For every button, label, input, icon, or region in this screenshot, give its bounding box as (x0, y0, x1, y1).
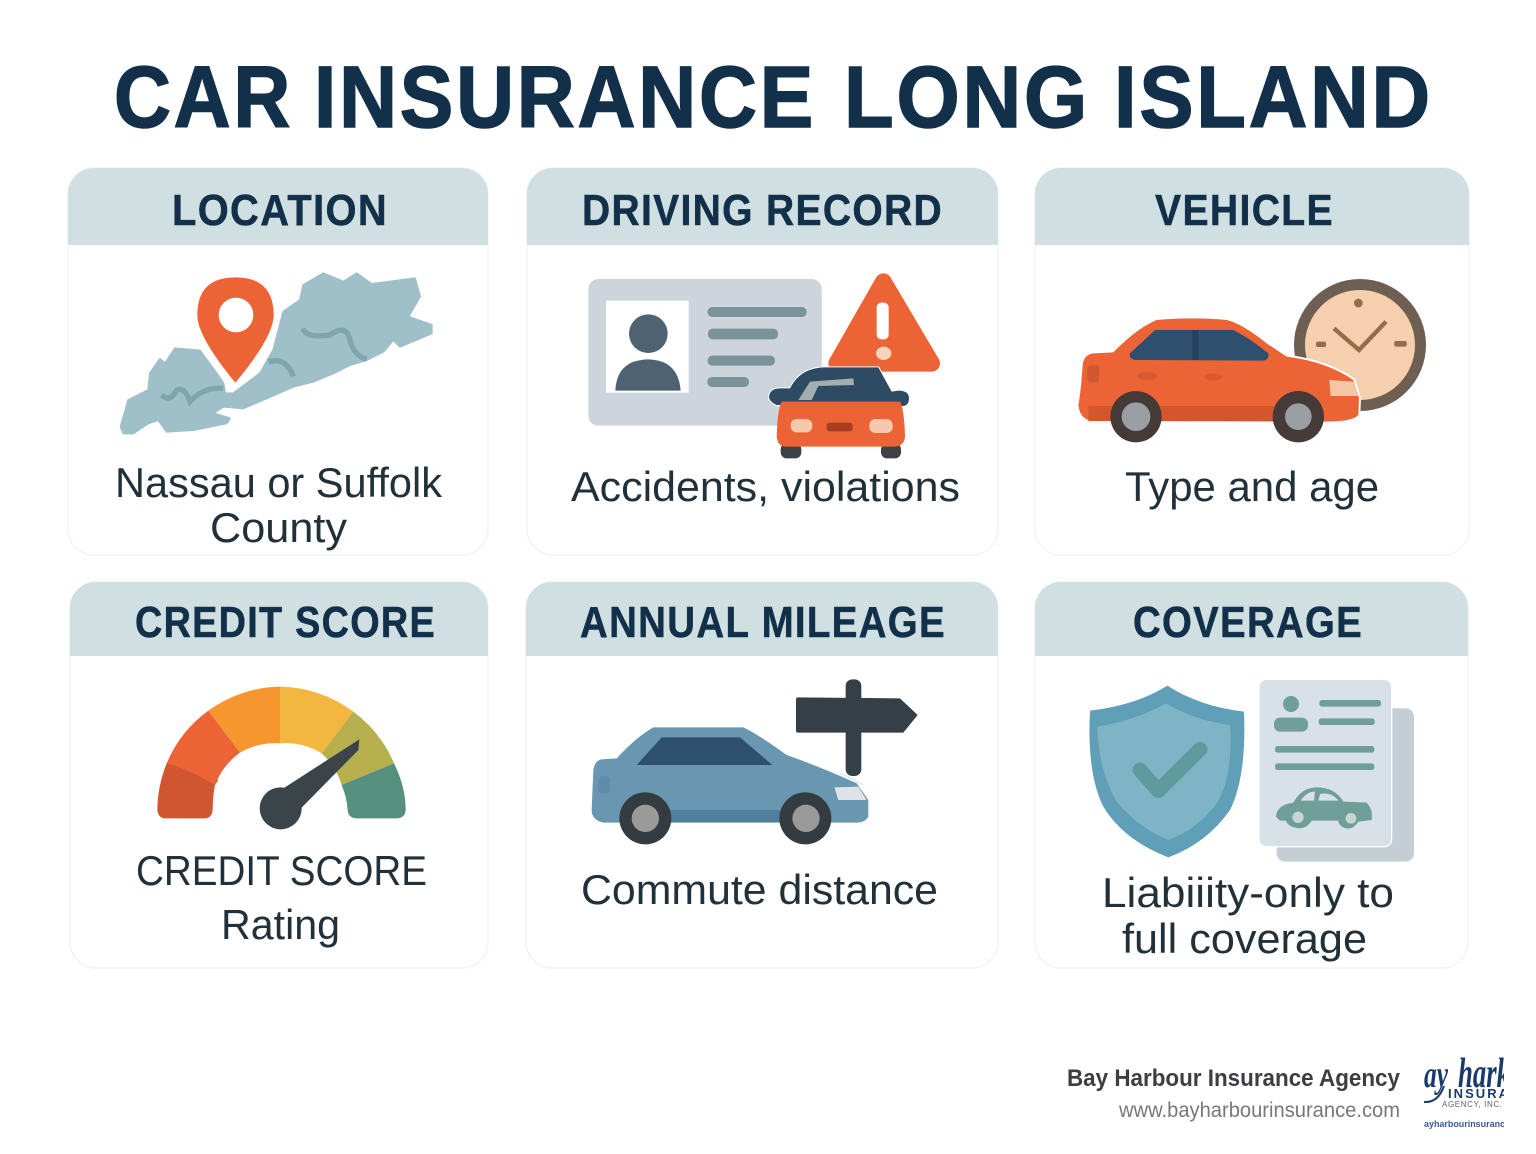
title: CAR (114, 49, 293, 146)
text: coverage: Liabiiity-only to (1102, 869, 1394, 916)
title: INSURANCE (314, 49, 816, 146)
heading: location: LOCATION (172, 186, 388, 235)
panel: annual mileage (526, 582, 998, 968)
text: credit score: CREDIT SCORE (136, 847, 427, 894)
text: driving record: Accidents, violations (571, 463, 960, 510)
heading: coverage: COVERAGE (1133, 598, 1363, 647)
icon: gauge (157, 687, 406, 829)
title: ISLAND (1114, 49, 1433, 146)
icon: car and clock (1078, 279, 1426, 442)
icon: car and road sign (592, 679, 918, 844)
text: location: Nassau or Suffolk (115, 459, 443, 506)
text: coverage (1102, 869, 1394, 962)
logo: Bay Harbour Insurance Agency: AGENCY, INC. (1442, 1100, 1502, 1109)
heading: vehicle: VEHICLE (1155, 186, 1334, 235)
panel: location (68, 168, 488, 555)
icon: Long Island map with pin (121, 273, 432, 433)
heading: annual mileage: ANNUAL MILEAGE (580, 598, 946, 647)
panel: vehicle (1035, 168, 1469, 555)
text: location: County (210, 504, 347, 551)
logo: Bay Harbour Insurance Agency: ay (1424, 1054, 1448, 1096)
text: credit score (136, 847, 427, 948)
text: annual mileage: Commute distance (581, 866, 938, 913)
panel: credit score (70, 582, 488, 968)
logo: Bay Harbour Insurance Agency (1424, 1058, 1504, 1129)
text: coverage: full coverage (1122, 915, 1367, 962)
panel: driving record (527, 168, 998, 555)
footer: agency name: Bay Harbour Insurance Agency (1067, 1065, 1401, 1092)
logo: Bay Harbour Insurance Agency: ayharbourinsurance (1424, 1119, 1510, 1130)
title (114, 49, 1433, 146)
text: location (115, 459, 443, 551)
text: vehicle: Type and age (1125, 463, 1379, 510)
logo: Bay Harbour Insurance Agency: INSURA (1448, 1086, 1509, 1101)
title: LONG (844, 49, 1090, 146)
heading: credit score: CREDIT SCORE (135, 598, 436, 647)
heading: driving record: DRIVING RECORD (582, 186, 943, 235)
icon: licence, warning and car (588, 279, 932, 458)
icon: shield and policy document (1089, 679, 1414, 862)
panel: coverage (1035, 582, 1468, 968)
text: credit score: Rating (221, 901, 340, 948)
footer: website: www.bayharbourinsurance.com (1118, 1099, 1400, 1122)
